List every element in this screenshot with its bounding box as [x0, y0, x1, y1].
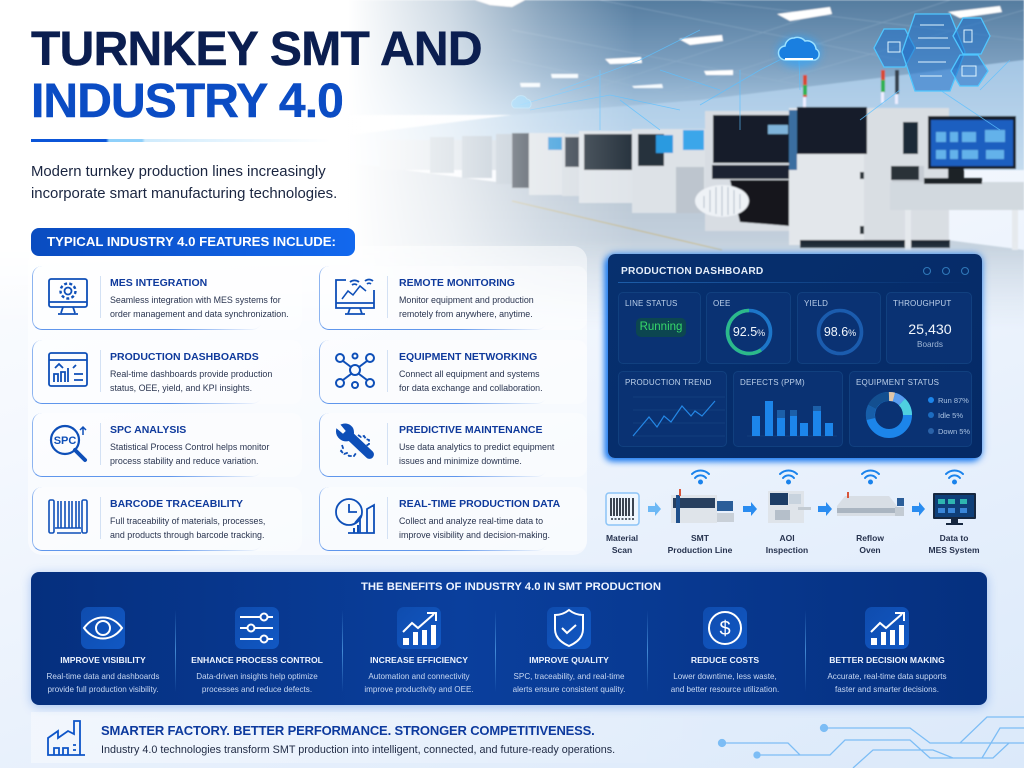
- tile: equipment status: [849, 371, 972, 447]
- label: MES: [928, 533, 980, 555]
- footer strip: [31, 712, 731, 763]
- footer text: Industry 4.0 technologies transform SMT production into intelligent, connected, and future-ready operations.: [101, 744, 615, 756]
- heading: features: TYPICAL INDUSTRY 4.0 FEATURES INCLUDE:: [47, 234, 336, 249]
- distant machines: [492, 141, 496, 170]
- benefit: process control: ENHANCE PROCESS CONTROL: [191, 655, 323, 665]
- card: SPC analysis: [32, 413, 302, 477]
- benefit: costs: [671, 607, 779, 694]
- process flow: [605, 470, 980, 555]
- card: barcode traceability: Full traceability of materials, processes,: [110, 516, 265, 526]
- panel: benefits: [31, 572, 987, 705]
- card: SPC analysis: SPC: [54, 435, 76, 447]
- card: predictive maintenance: PREDICTIVE MAINTENANCE: [399, 424, 543, 436]
- tile: OEE gauge: 92.5%: [733, 325, 765, 339]
- label: SMT line: SMT: [691, 533, 709, 543]
- card: real-time production data: Collect and analyze real-time data to: [399, 516, 543, 526]
- card: barcode traceability: BARCODE TRACEABILITY: [110, 498, 243, 510]
- title accent: INDUSTRY 4.0: [31, 75, 343, 128]
- throughput value: 25,430: [908, 322, 952, 338]
- tile: equipment status: Run 87%: [938, 396, 969, 405]
- card: MES integration: [32, 266, 302, 330]
- benefit: quality: IMPROVE QUALITY: [529, 655, 609, 665]
- label: MES: MES System: [928, 545, 980, 555]
- benefit: process control: [191, 607, 323, 694]
- benefit: costs: and better resource utilization.: [671, 685, 779, 694]
- tile: production trend: PRODUCTION TREND: [625, 378, 712, 387]
- card: barcode traceability: [32, 487, 302, 551]
- tile: yield gauge: 98.6%: [824, 325, 856, 339]
- label: SMT line: Production Line: [668, 545, 732, 555]
- card: remote monitoring: REMOTE MONITORING: [399, 277, 515, 289]
- title rule: [31, 139, 331, 142]
- card: production dashboards: status, OEE, yield, and KPI insights.: [110, 383, 252, 393]
- label: reflow: Oven: [859, 545, 881, 555]
- wifi icons: [691, 470, 964, 484]
- card: MES integration: MES INTEGRATION: [110, 277, 207, 289]
- machine row: [512, 133, 532, 188]
- benefit: decisions: BETTER DECISION MAKING: [829, 655, 945, 665]
- benefit: visibility: provide full production visibility.: [48, 685, 158, 694]
- card: MES integration: Seamless integration with MES systems for: [110, 295, 281, 305]
- card: production dashboards: PRODUCTION DASHBOARDS: [110, 351, 259, 363]
- card: MES integration: order management and data synchronization.: [110, 309, 289, 319]
- icon: MES monitor: [933, 493, 976, 525]
- card: barcode traceability: and products through barcode tracking.: [110, 530, 264, 540]
- heading: features: [31, 228, 355, 256]
- benefit: process control: Data-driven insights help optimize: [196, 672, 318, 681]
- panel: production dashboard: [608, 254, 982, 458]
- intro text: incorporate smart manufacturing technologies.: [31, 186, 337, 202]
- card: equipment networking: [319, 340, 587, 404]
- intro text: Modern turnkey production lines increasingly: [31, 164, 326, 180]
- card: remote monitoring: [319, 266, 587, 330]
- status badge: [636, 318, 686, 337]
- benefit: efficiency: [364, 607, 474, 694]
- card: SPC analysis: SPC ANALYSIS: [110, 424, 186, 436]
- label: MES: Data to: [940, 533, 968, 543]
- card: real-time production data: REAL-TIME PRODUCTION DATA: [399, 498, 560, 510]
- mid machine: [705, 111, 793, 231]
- card: predictive maintenance: Use data analytics to predict equipment: [399, 442, 554, 452]
- icon: AOI machine: [768, 491, 811, 523]
- tile: defects bar chart: DEFECTS (PPM): [740, 378, 805, 387]
- label: reflow: Reflow: [856, 533, 884, 543]
- card: equipment networking: EQUIPMENT NETWORKING: [399, 351, 537, 363]
- throughput unit: Boards: [917, 340, 943, 349]
- benefit: quality: SPC, traceability, and real-time: [514, 672, 624, 681]
- benefit: visibility: IMPROVE VISIBILITY: [60, 655, 146, 665]
- dashboard title: PRODUCTION DASHBOARD: [621, 266, 764, 277]
- tile: throughput: THROUGHPUT: [893, 299, 951, 308]
- label: AOI: Inspection: [766, 545, 808, 555]
- ceiling grid: [602, 0, 1024, 55]
- icon: hexagon hologram: [874, 14, 990, 91]
- card: predictive maintenance: issues and minimize downtime.: [399, 456, 522, 466]
- label: material scan: [606, 533, 638, 555]
- benefit: quality: alerts ensure consistent quality.: [513, 685, 625, 694]
- label: reflow: [856, 533, 884, 555]
- icon: SMT line: [671, 489, 734, 523]
- tile: yield gauge: YIELD: [804, 299, 828, 308]
- card: equipment networking: for data exchange and collaboration.: [399, 383, 543, 393]
- ceiling lights: [777, 7, 832, 21]
- left fade: [0, 0, 623, 282]
- icon: cloud hologram: [777, 36, 821, 68]
- icon: reflow oven: [837, 492, 904, 516]
- benefit: efficiency: improve productivity and OEE.: [364, 685, 474, 694]
- card: equipment networking: Connect all equipment and systems: [399, 369, 540, 379]
- card: remote monitoring: remotely from anywhere, anytime.: [399, 309, 533, 319]
- benefit: quality: [513, 607, 625, 694]
- label: SMT line: [668, 533, 732, 555]
- tile: OEE gauge: OEE: [713, 299, 730, 308]
- benefit: efficiency: Automation and connectivity: [368, 672, 470, 681]
- card: SPC analysis: Statistical Process Control helps monitor: [110, 442, 269, 452]
- benefit: visibility: Real-time data and dashboards: [47, 672, 159, 681]
- card: production dashboards: Real-time dashboards provide production: [110, 369, 272, 379]
- tile: production trend: [618, 371, 727, 447]
- label: material scan: Material: [606, 533, 638, 543]
- benefit: decisions: [827, 607, 947, 694]
- tile: OEE gauge: [706, 292, 791, 364]
- benefit: decisions: faster and smarter decisions.: [835, 685, 939, 694]
- tile: defects bar chart: [733, 371, 843, 447]
- tile: equipment status: EQUIPMENT STATUS: [856, 378, 939, 387]
- big machine: [862, 108, 950, 242]
- benefit: process control: processes and reduce defects.: [202, 685, 312, 694]
- panel: features background: [28, 246, 587, 555]
- benefit: efficiency: INCREASE EFFICIENCY: [370, 655, 468, 665]
- icon: factory: [47, 720, 85, 756]
- benefits heading: THE BENEFITS OF INDUSTRY 4.0 IN SMT PRODUCTION: [361, 581, 661, 593]
- card: production dashboards: [32, 340, 302, 404]
- card: remote monitoring: Monitor equipment and production: [399, 295, 534, 305]
- hero photo: SMT factory line: [371, 0, 1024, 305]
- benefit: costs: $: [719, 618, 731, 640]
- benefit: visibility: [47, 607, 160, 694]
- benefit: decisions: Accurate, real-time data supports: [827, 672, 947, 681]
- title: TURNKEY SMT AND: [31, 23, 482, 76]
- tile: throughput: [886, 292, 972, 364]
- icon: faint cloud: [512, 96, 531, 108]
- benefit: costs: Lower downtime, less waste,: [673, 672, 777, 681]
- circuit decoration: [718, 716, 1024, 768]
- label: AOI: AOI: [779, 533, 795, 543]
- card: SPC analysis: process stability and reduce variation.: [110, 456, 258, 466]
- status badge: Running: [640, 321, 682, 333]
- footer heading: SMARTER FACTORY. BETTER PERFORMANCE. STRONGER COMPETITIVENESS.: [101, 723, 595, 738]
- desk + monitor: [890, 182, 1024, 210]
- tile: line status: [618, 292, 701, 364]
- tile: line status: LINE STATUS: [625, 299, 678, 308]
- card: real-time production data: improve visibility and decision-making.: [399, 530, 550, 540]
- label: material scan: Scan: [612, 545, 632, 555]
- network lines: [520, 30, 1010, 130]
- label: AOI: [766, 533, 808, 555]
- card: predictive maintenance: [319, 413, 587, 477]
- icon: barcode scan: [605, 492, 640, 526]
- tile: equipment status: Idle 5%: [938, 411, 963, 420]
- intro text: [31, 164, 337, 202]
- tile: yield gauge: [797, 292, 881, 364]
- dashboard window controls: [923, 267, 969, 275]
- card: real-time production data: [319, 487, 587, 551]
- benefit: costs: REDUCE COSTS: [691, 655, 759, 665]
- floor line: [512, 201, 722, 250]
- tile: equipment status: Down 5%: [938, 427, 970, 436]
- arrows: [648, 502, 925, 516]
- signal towers: [803, 75, 807, 97]
